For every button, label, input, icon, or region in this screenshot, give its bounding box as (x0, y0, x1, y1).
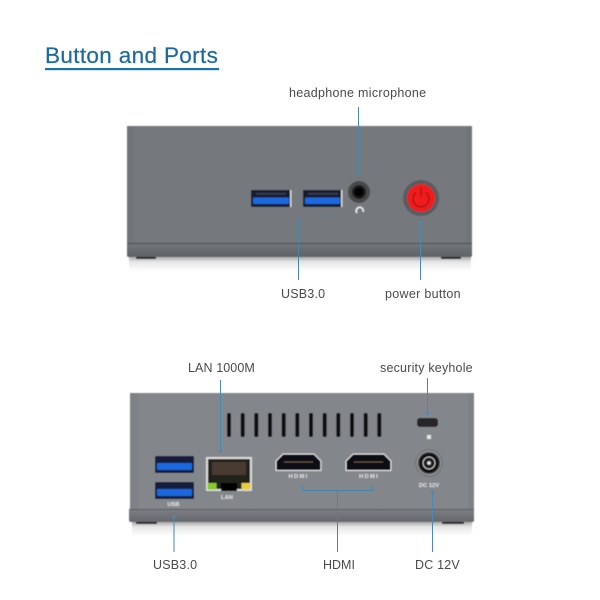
device: front view (127, 126, 472, 271)
port: front USB 1 (251, 190, 292, 207)
callout line: headphone (357, 107, 360, 176)
label: security keyhole: security keyhole (380, 361, 473, 375)
device: rear view (129, 393, 474, 536)
text: DC 12V marking: DC 12V (419, 483, 439, 489)
icon: headset (356, 207, 363, 213)
port: HDMI 1 (276, 454, 321, 470)
label: LAN 1000M: LAN 1000M (188, 361, 255, 375)
power button (403, 180, 439, 216)
callout line: keyhole (426, 378, 429, 415)
port: front USB 2 (303, 190, 342, 207)
title: Button and Ports (45, 43, 218, 68)
text: HDMI marking 1: HDMI (288, 474, 309, 480)
callout bracket: front USB (271, 213, 325, 280)
port: audio jack (348, 181, 370, 203)
callout line: DC 12V (431, 490, 434, 552)
callout line: power (418, 220, 422, 280)
text: HDMI marking 2: HDMI (359, 474, 379, 480)
label: DC 12V: DC 12V (415, 558, 460, 572)
port: rear USB 2 (155, 482, 194, 499)
label: rear USB3.0: USB3.0 (153, 558, 197, 572)
security keyhole slot (417, 418, 438, 427)
callout bracket: HDMI (302, 486, 373, 552)
port: rear USB 1 (155, 456, 194, 473)
port: HDMI 2 (346, 454, 391, 470)
callout line: rear USB (172, 515, 176, 552)
port: LAN (206, 457, 252, 491)
vents (227, 413, 381, 437)
label: front USB3.0: USB3.0 (281, 287, 325, 301)
callout line: LAN (219, 380, 222, 452)
icon: lock (427, 435, 431, 439)
label: power button: power button (385, 287, 461, 301)
text: USB marking: USB (167, 502, 180, 508)
port: DC jack (416, 450, 442, 476)
text: LAN marking: LAN (221, 495, 233, 501)
label: HDMI: HDMI (323, 558, 355, 572)
label: headphone microphone: headphone microphone (289, 86, 426, 100)
